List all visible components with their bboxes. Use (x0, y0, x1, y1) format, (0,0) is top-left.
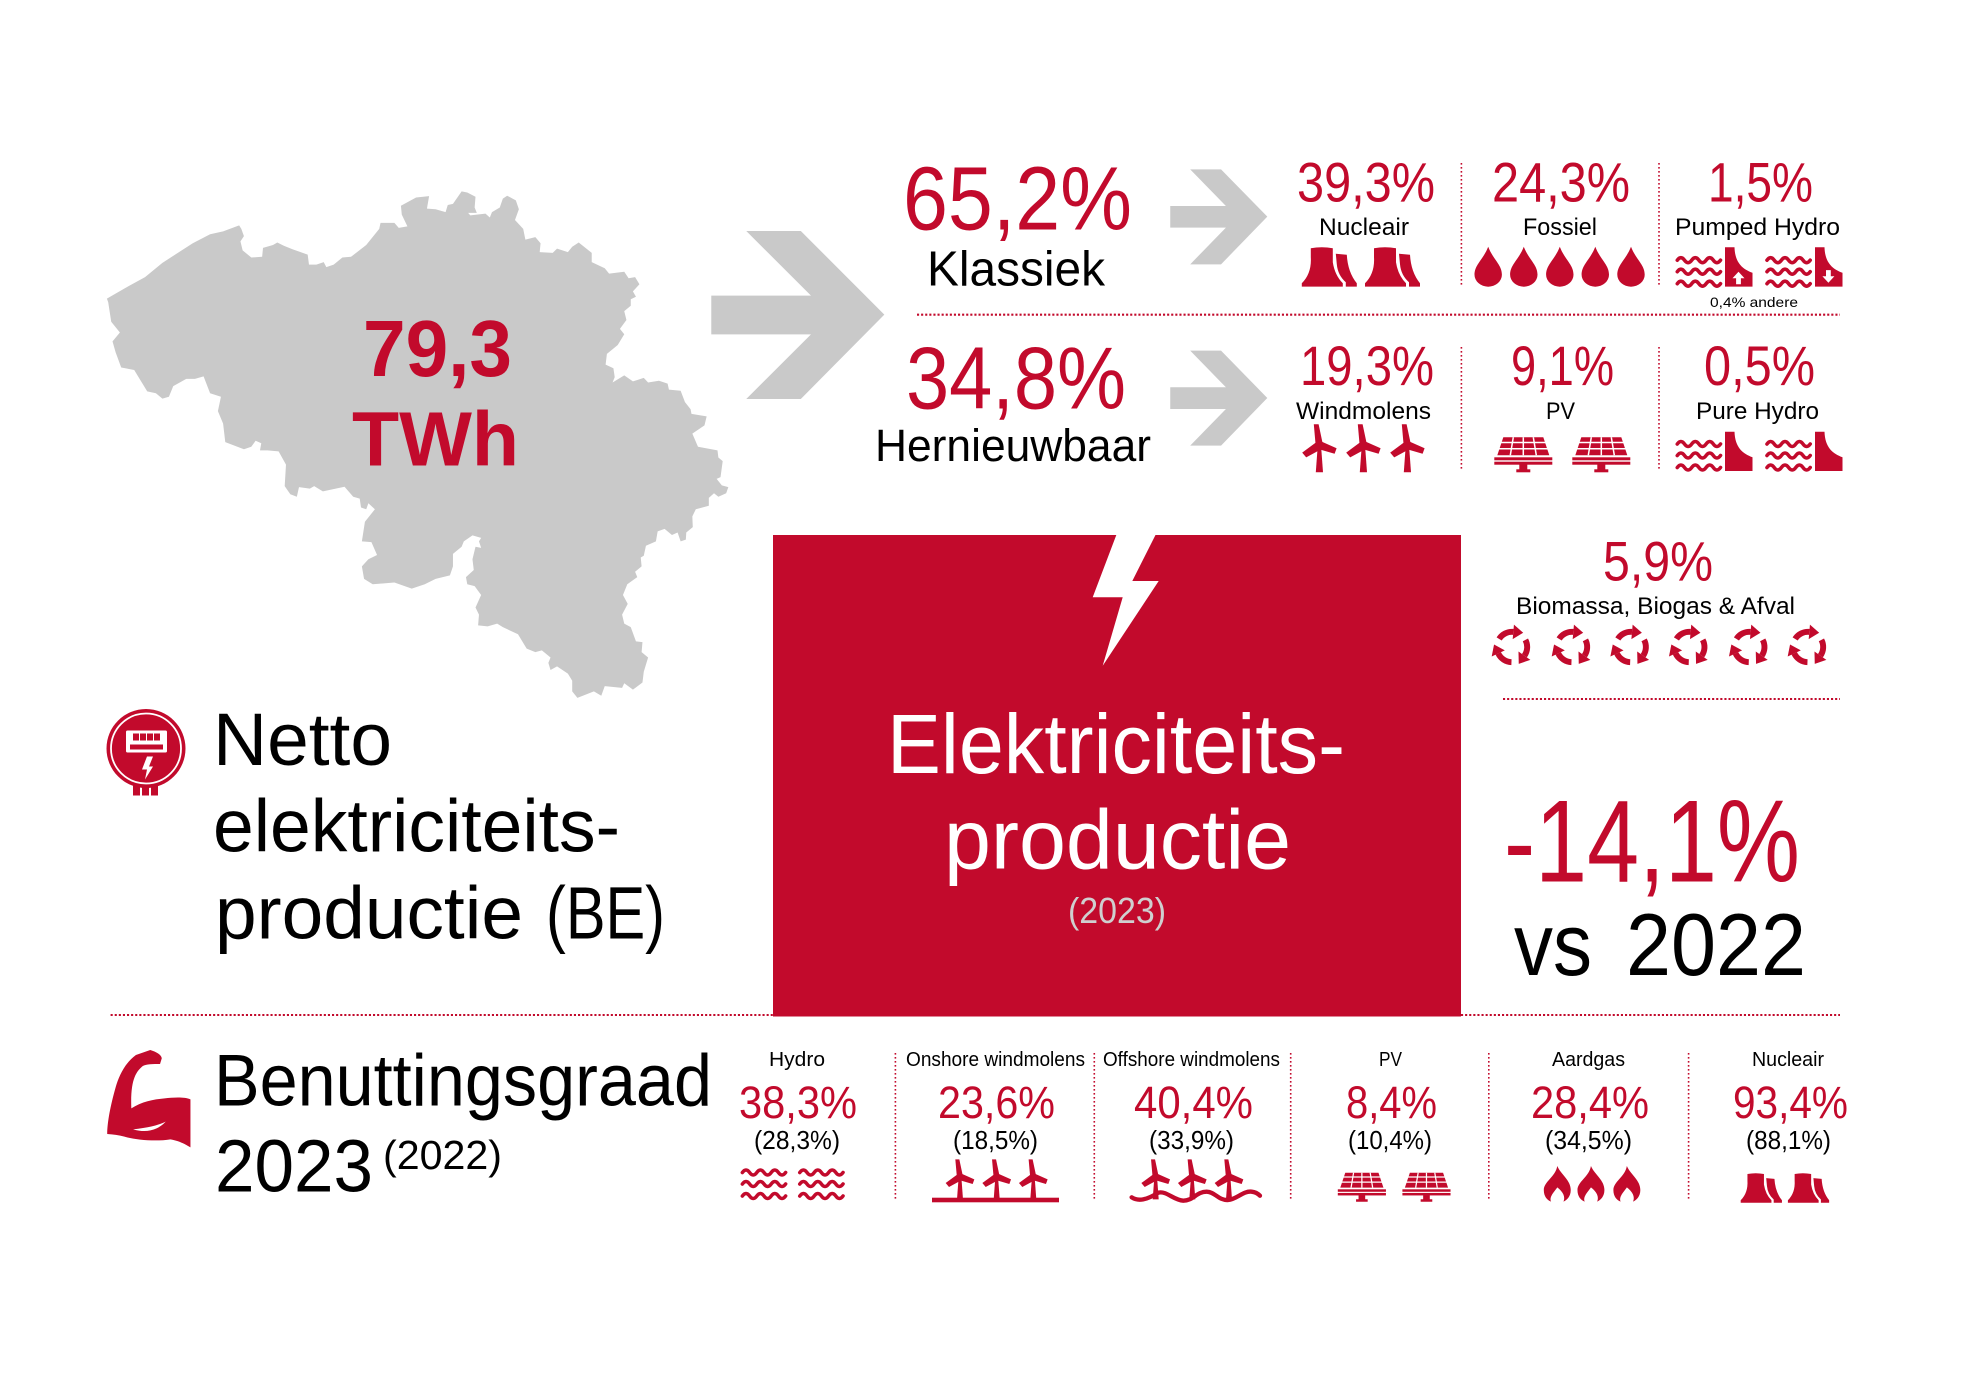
heading: Benuttingsgraad 2023 (2022): 2023 (215, 1125, 373, 1208)
capacity factor: Nucleair: (88,1%) (1746, 1125, 1831, 1155)
nuclear 39,3%: Nucleair (1319, 214, 1409, 241)
capacity factor: Offshore windmolens: 40,4% (1134, 1077, 1253, 1128)
capacity factor: Hydro (739, 1049, 857, 1198)
heading: Netto elektriciteitsproductie (BE): Netto (213, 698, 392, 781)
wind 19,3%: 19,3% (1300, 334, 1434, 397)
renewable share 34,8% Hernieuwbaar: Hernieuwbaar (875, 420, 1151, 471)
pumped hydro 1,5%: Pumped Hydro (1675, 214, 1840, 241)
capacity factor: Onshore windmolens: (18,5%) (953, 1125, 1038, 1155)
panel title (887, 697, 1345, 886)
arrow: classic (1170, 169, 1267, 264)
icon: water and dam with up arrow (1677, 247, 1752, 287)
heading: Netto elektriciteitsproductie (BE): productie (215, 871, 523, 954)
nuclear 39,3% (1297, 151, 1435, 287)
icon: oil drops (1474, 247, 1645, 287)
fossil 24,3%: Fossiel (1523, 214, 1597, 241)
PV 9,1%: PV (1546, 398, 1575, 425)
icon: electricity meter (106, 709, 186, 796)
panel title: Elektriciteits- (887, 697, 1345, 791)
heading: Benuttingsgraad 2023 (2022) (214, 1041, 712, 1208)
icon: flexed arm (107, 1050, 190, 1147)
capacity factor: Hydro: 38,3% (739, 1077, 857, 1128)
heading: Netto elektriciteitsproductie (BE): elektriciteits- (213, 785, 620, 868)
classic share 65,2% Klassiek: Klassiek (927, 243, 1105, 297)
capacity factor: Nucleair (1733, 1049, 1848, 1203)
total production 79,3 TWh: TWh (352, 397, 519, 483)
capacity factor: PV: PV (1379, 1049, 1403, 1071)
capacity factor: Aardgas (1531, 1049, 1649, 1202)
map of Belgium (107, 191, 728, 698)
icon: gas flames (1544, 1166, 1640, 1202)
capacity factor: Hydro: (28,3%) (754, 1125, 840, 1155)
capacity factor: Aardgas: Aardgas (1552, 1049, 1625, 1071)
heading: Netto elektriciteitsproductie (BE): (BE) (546, 871, 665, 954)
icon: onshore turbines (932, 1159, 1059, 1202)
capacity factor: Hydro: Hydro (769, 1049, 825, 1071)
heading: Netto elektriciteitsproductie (BE) (213, 698, 665, 954)
capacity factor: Nucleair: Nucleair (1752, 1049, 1824, 1071)
icon: solar panels (1494, 437, 1630, 472)
classic share 65,2% Klassiek: 65,2% (903, 149, 1132, 249)
capacity factor: Offshore windmolens: (33,9%) (1149, 1125, 1234, 1155)
fossil 24,3%: 24,3% (1492, 151, 1630, 214)
icon: solar panels (1338, 1173, 1451, 1202)
capacity factor: PV (1338, 1049, 1451, 1202)
biomass 5,9%: Biomassa, Biogas & Afval (1516, 593, 1795, 620)
capacity factor: Aardgas: (34,5%) (1545, 1125, 1632, 1155)
icon: recycling symbols (1487, 625, 1834, 669)
note: other share: 0,4% andere (1710, 294, 1798, 310)
change versus 2022: -14,1% (1504, 776, 1800, 907)
classic share 65,2% Klassiek (903, 149, 1132, 297)
heading: Benuttingsgraad 2023 (2022): (2022) (383, 1132, 502, 1178)
arrow: renewable (1170, 351, 1267, 446)
icon: cooling towers (1741, 1173, 1829, 1203)
icon: cooling towers (1302, 247, 1420, 287)
change versus 2022: vs (1514, 895, 1592, 994)
capacity factor: Offshore windmolens (1103, 1049, 1280, 1201)
change versus 2022 (1504, 776, 1806, 994)
capacity factor: Offshore windmolens: Offshore windmolens (1103, 1049, 1280, 1071)
wind 19,3%: Windmolens (1296, 398, 1431, 425)
change versus 2022: 2022 (1626, 895, 1806, 994)
PV 9,1%: 9,1% (1511, 334, 1614, 397)
heading: Benuttingsgraad 2023 (2022): Benuttingsgraad (214, 1041, 712, 1122)
icon: offshore turbines (1132, 1159, 1260, 1201)
total production 79,3 TWh: 79,3 (363, 304, 512, 393)
pure hydro 0,5%: Pure Hydro (1696, 398, 1819, 425)
pumped hydro 1,5% (1675, 151, 1842, 310)
nuclear 39,3%: 39,3% (1297, 151, 1435, 214)
icon: water waves (742, 1170, 843, 1198)
icon: lightning bolt (1093, 534, 1159, 666)
pure hydro 0,5% (1677, 334, 1842, 471)
pumped hydro 1,5%: 1,5% (1708, 151, 1813, 214)
renewable share 34,8% Hernieuwbaar (875, 328, 1151, 471)
fossil 24,3% (1474, 151, 1645, 287)
capacity factor: Aardgas: 28,4% (1531, 1077, 1649, 1128)
total production 79,3 TWh (352, 304, 519, 483)
icon: water and dam with down arrow (1767, 247, 1842, 287)
wind 19,3% (1296, 334, 1434, 472)
large arrow from map to split (711, 231, 884, 399)
panel title: productie (944, 792, 1291, 886)
PV 9,1% (1494, 334, 1630, 472)
biomass 5,9%: 5,9% (1603, 530, 1713, 593)
capacity factor: PV: (10,4%) (1348, 1125, 1432, 1155)
icon: wind turbines (1302, 424, 1425, 472)
panel year: (2023) (1068, 890, 1166, 931)
pure hydro 0,5%: 0,5% (1704, 334, 1815, 397)
capacity factor: Onshore windmolens: 23,6% (938, 1077, 1055, 1128)
biomass 5,9% (1487, 530, 1834, 669)
capacity factor: Onshore windmolens (906, 1049, 1085, 1202)
icon: water and dams (1677, 432, 1842, 471)
capacity factor: Nucleair: 93,4% (1733, 1077, 1848, 1128)
capacity factor: PV: 8,4% (1346, 1077, 1437, 1128)
capacity factor: Onshore windmolens: Onshore windmolens (906, 1049, 1085, 1071)
renewable share 34,8% Hernieuwbaar: 34,8% (906, 328, 1126, 427)
panel: Elektriciteitsproductie (773, 534, 1461, 1016)
